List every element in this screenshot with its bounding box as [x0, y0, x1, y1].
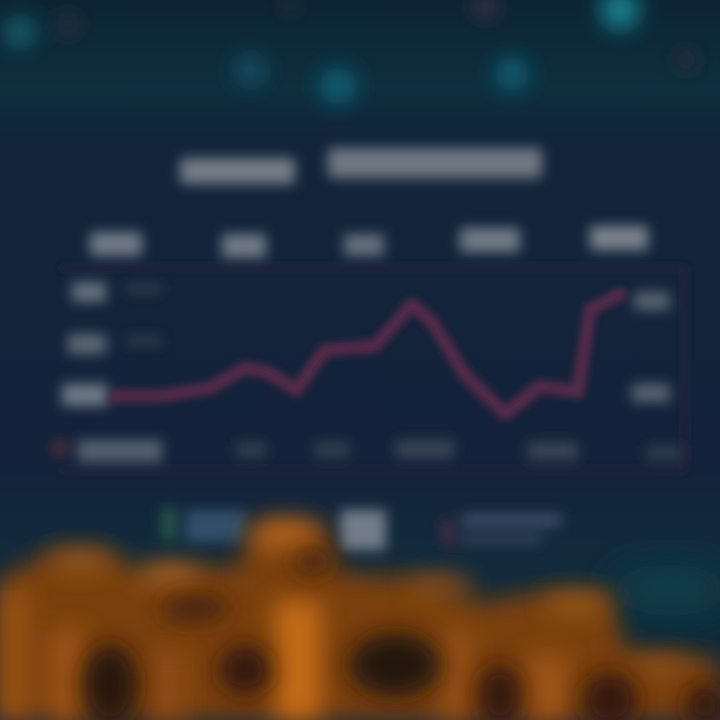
line chart	[115, 294, 620, 414]
chart frame	[60, 268, 685, 470]
legend	[162, 508, 562, 550]
coin highlights	[0, 519, 696, 720]
coin shadows	[82, 550, 720, 720]
coin base	[0, 522, 720, 720]
x axis labels	[52, 440, 682, 462]
top bokeh lights	[5, 0, 695, 105]
coin pile	[0, 519, 720, 720]
column headers	[90, 226, 648, 258]
y axis labels	[62, 282, 670, 406]
teal glow right of coins	[610, 565, 720, 615]
chart title	[180, 148, 542, 184]
